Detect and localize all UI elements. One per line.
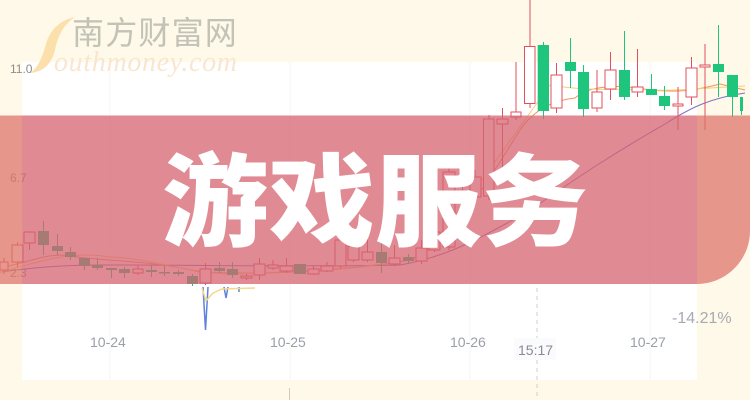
candlesticks: rising (red): [0, 0, 710, 285]
price axis labels: [10, 62, 33, 280]
date axis labels: 10-25: [270, 334, 306, 350]
percent change label: -14.21%: [672, 310, 732, 327]
price axis labels: 6.7: [10, 171, 27, 185]
pink title band: [0, 116, 750, 284]
watermark logo: [30, 15, 238, 78]
date axis labels: 10-26: [450, 334, 486, 350]
time tag: [514, 338, 556, 360]
percentage line spike: [202, 287, 255, 330]
chart panel background: [22, 62, 697, 380]
date axis labels: 10-27: [630, 334, 666, 350]
lower tick mark: [288, 388, 290, 400]
date axis labels: [90, 334, 666, 350]
crosshair dashed line: [536, 288, 538, 400]
watermark domain: outhmoney.com: [54, 47, 237, 78]
price axis labels: 2.3: [10, 266, 27, 280]
date axis labels: 10-24: [90, 334, 126, 350]
time tag: 15:17: [518, 342, 553, 358]
candlesticks: falling (green): [38, 25, 743, 286]
title: 游戏服务: [162, 122, 588, 268]
moving average lines: [0, 84, 745, 274]
price axis labels: 11.0: [10, 62, 33, 76]
icon: orange swoosh S: [30, 17, 75, 73]
watermark Chinese name: 南方财富网: [72, 15, 238, 51]
